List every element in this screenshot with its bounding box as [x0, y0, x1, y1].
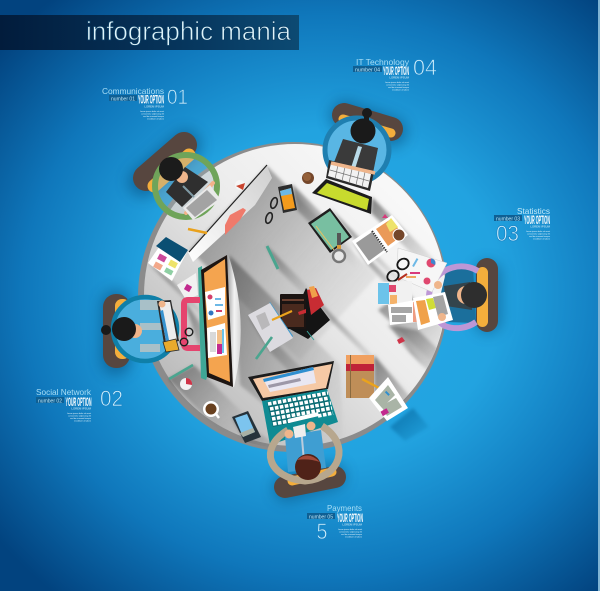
red marker [397, 337, 405, 344]
keyboard [267, 392, 332, 427]
label 01 communications: incididunt ut labore [147, 118, 165, 120]
text sheet [388, 300, 417, 325]
label 05 payments: Lorem ipsum dolor sit amet [338, 528, 362, 531]
person 05 payments [270, 422, 339, 488]
person 03 statistics [429, 258, 498, 332]
label 02 social network: sed do eiusmod tempor [70, 417, 91, 420]
keyboard [326, 160, 374, 191]
monitor angled panel [188, 166, 272, 262]
phone and hands [293, 424, 306, 438]
tablet monitor with charts [198, 254, 241, 387]
tablet device [232, 411, 261, 443]
hands [434, 281, 442, 289]
number tag: number 03 [496, 216, 520, 222]
number tag: number 04 [355, 67, 380, 73]
purple ring [429, 266, 478, 328]
statistics papers [378, 248, 453, 330]
brochure [148, 237, 188, 281]
spiral notebook [352, 214, 408, 265]
arms [186, 183, 213, 213]
label 04 it technology: incididunt ut labore [392, 88, 410, 92]
chart panel bottom [207, 323, 227, 358]
magnifier [333, 233, 345, 262]
label 02 social network: YOUR OPTION [66, 395, 92, 409]
label 05 payments: consectetur adipiscing elit [339, 530, 362, 534]
desk monitor, large [188, 165, 272, 262]
label 02 social network: LOREM IPSUM [71, 406, 92, 410]
label 05 payments [307, 503, 363, 544]
label 03 statistics: Lorem ipsum dolor sit amet [526, 230, 550, 233]
jacket [440, 266, 476, 323]
label 01 communications: YOUR OPTION [138, 92, 164, 106]
small report [177, 273, 198, 300]
round table [138, 142, 446, 452]
chair [285, 477, 335, 487]
laptop bottom [248, 361, 338, 445]
label 05 payments: sed do eiusmod tempor [341, 533, 362, 536]
label 03 statistics: incididunt ut labore [533, 238, 551, 240]
label 01 communications: Communications [102, 86, 164, 96]
label 02 social network: Lorem ipsum dolor sit amet [67, 412, 91, 415]
green ring body [155, 155, 217, 217]
head [128, 324, 142, 338]
label 04 it technology: 04 [413, 55, 437, 80]
head [176, 171, 188, 183]
pencil green [267, 246, 278, 269]
label 05 payments: 5 [316, 519, 328, 544]
label 01 communications: consectetur adipiscing elit [141, 112, 164, 116]
head [295, 454, 321, 480]
label 03 statistics: sed do eiusmod tempor [529, 235, 550, 238]
pencil green lower [169, 365, 193, 379]
tan ring [270, 426, 339, 481]
number tag: number 05 [309, 514, 333, 520]
head [350, 118, 376, 144]
label 02 social network: 02 [100, 386, 123, 411]
label 04 it technology: LOREM IPSUM [389, 76, 410, 80]
brown book [346, 355, 381, 398]
keyboard [183, 185, 221, 220]
colour sheet [413, 292, 453, 330]
long shadows on table [150, 165, 442, 444]
label 02 social network: incididunt ut labore [74, 420, 92, 422]
large chart paper [397, 248, 447, 292]
label 04 it technology: YOUR OPTION [383, 64, 409, 78]
blue ring body [326, 119, 388, 181]
label 05 payments: incididunt ut labore [345, 536, 363, 538]
pie chart [180, 378, 192, 390]
chart panel top [205, 287, 225, 320]
teal ring body [113, 297, 177, 361]
form paper [369, 377, 408, 421]
label 04 it technology [353, 55, 437, 92]
person 04 it technology [302, 108, 392, 214]
head [457, 286, 475, 304]
base [262, 389, 338, 445]
label 02 social network: consectetur adipiscing elit [68, 414, 91, 418]
title band [0, 15, 299, 50]
label 02 social network [36, 386, 123, 422]
screen [248, 361, 334, 401]
label 03 statistics: LOREM IPSUM [530, 224, 551, 228]
chair [344, 115, 391, 129]
label 04 it technology: sed do eiusmod tempor [388, 86, 409, 89]
glasses top [264, 197, 279, 224]
label 04 it technology: Lorem ipsum dolor sit amet [385, 81, 409, 84]
glasses [180, 328, 193, 346]
chair [476, 258, 498, 332]
green notebook [308, 208, 352, 253]
text: YOUR OPTION [337, 511, 363, 525]
label 01 communications: Lorem ipsum dolor sit amet [140, 110, 164, 113]
chair [146, 145, 184, 178]
orange pen [272, 311, 292, 320]
pencil orange top left [188, 229, 207, 233]
label 03 statistics [494, 206, 551, 246]
label 05 payments: LOREM IPSUM [342, 522, 363, 526]
title: infographic mania [86, 16, 292, 46]
chair [103, 294, 130, 368]
table shadow on background [390, 408, 429, 441]
body [285, 430, 326, 472]
label 05 payments: Payments [327, 503, 362, 513]
pink folder [180, 300, 200, 348]
phone [278, 184, 297, 213]
coffee cup [203, 401, 219, 418]
label 01 communications: sed do eiusmod tempor [143, 115, 164, 118]
number tag: number 01 [111, 96, 135, 102]
lime laptop screen [312, 179, 372, 214]
label 03 statistics: consectetur adipiscing elit [527, 232, 550, 236]
label 04 it technology: IT Technology [356, 57, 410, 67]
person 02 social network [101, 294, 179, 368]
keyboard [157, 300, 179, 344]
glasses [385, 256, 411, 284]
centre diary [280, 286, 330, 340]
label 01 communications: 01 [167, 86, 188, 109]
label 03 statistics: Statistics [517, 206, 550, 216]
label 01 communications: LOREM IPSUM [144, 104, 165, 108]
label 04 it technology: consectetur adipiscing elit [386, 84, 409, 86]
coffee [302, 172, 314, 184]
green pencil [256, 337, 272, 359]
person 01 communications [143, 145, 221, 220]
number tag: number 02 [38, 398, 62, 404]
grey report and pencils [248, 302, 293, 359]
label 03 statistics: 03 [496, 221, 519, 246]
left paper [378, 281, 412, 305]
label 02 social network: Social Network [36, 387, 92, 397]
label 01 communications [102, 86, 188, 120]
